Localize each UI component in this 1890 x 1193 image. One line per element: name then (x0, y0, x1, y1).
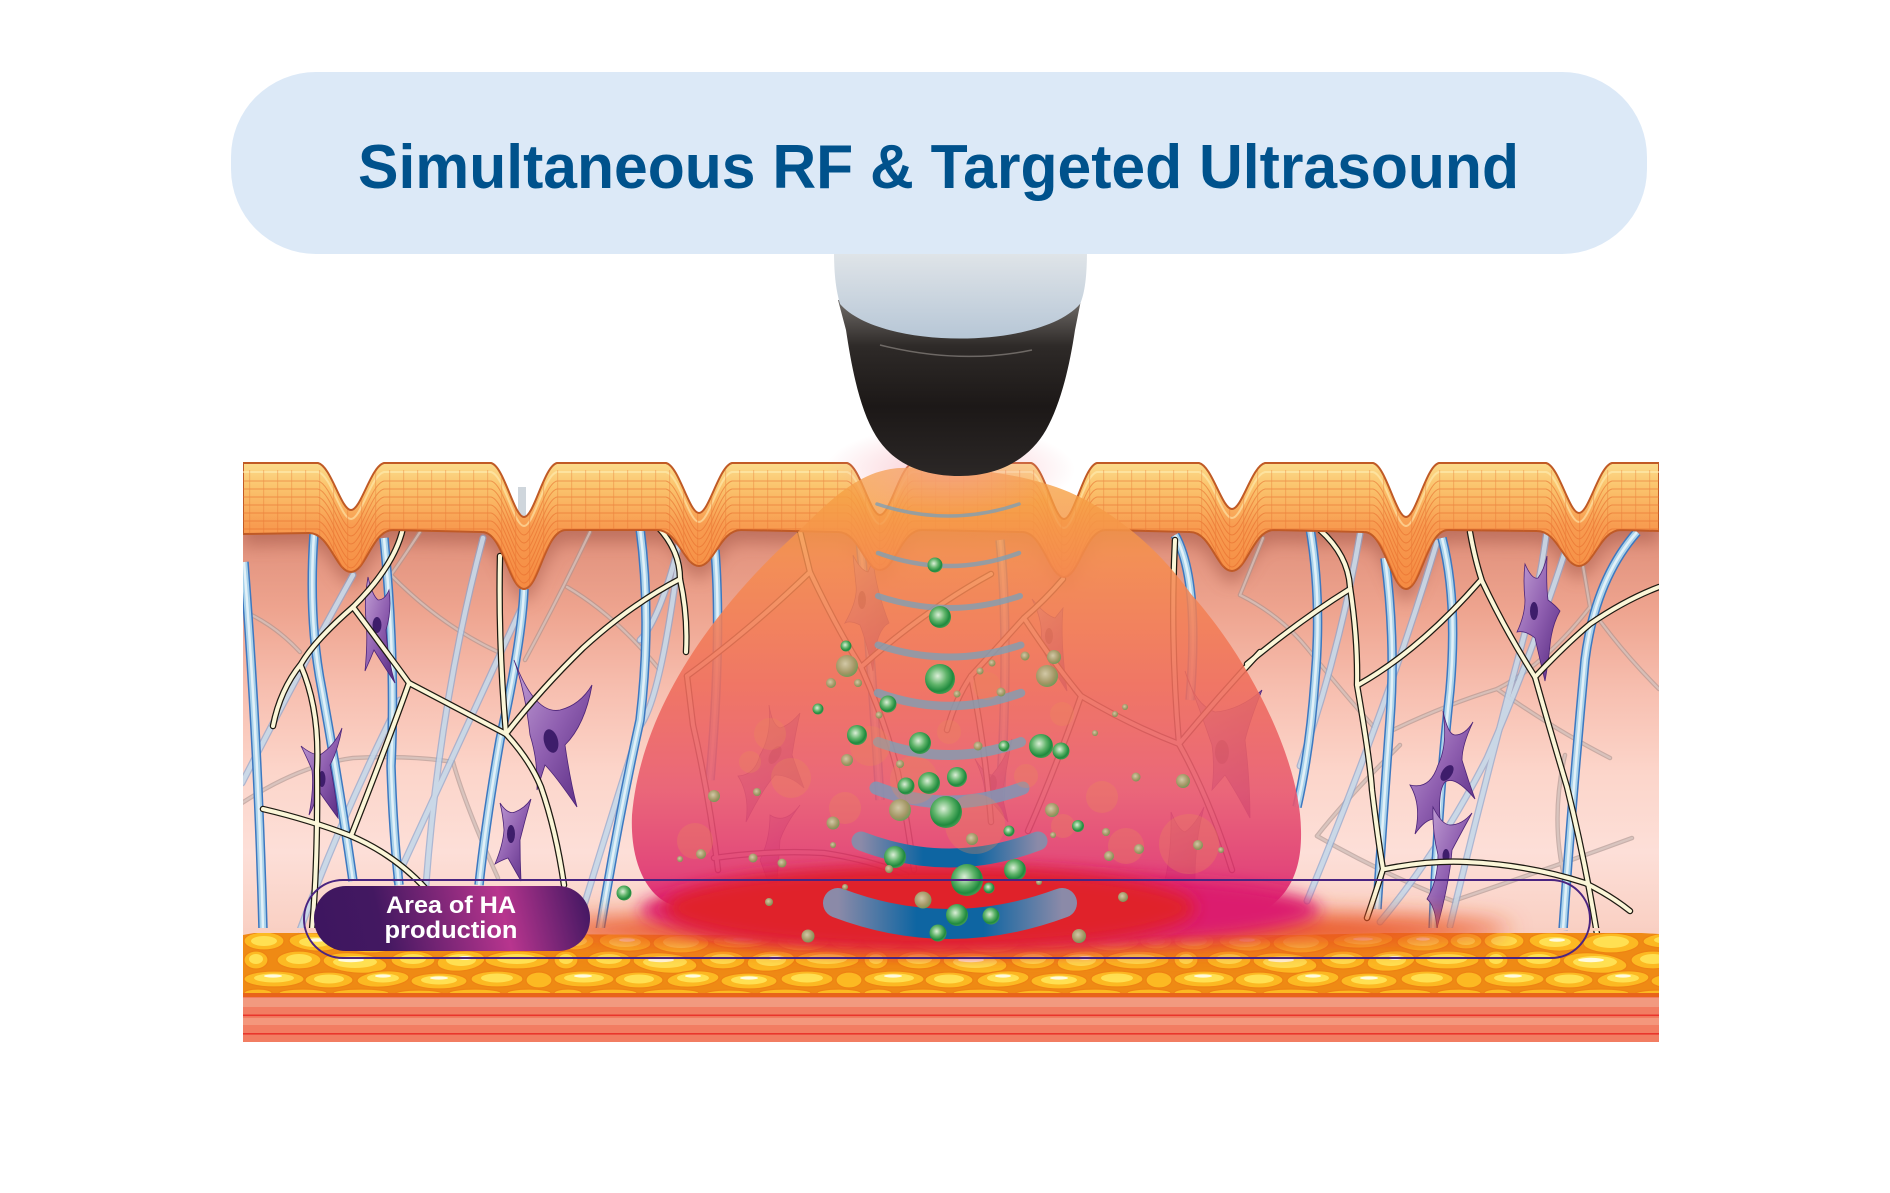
fat layer (243, 928, 1659, 997)
title pill (231, 72, 1647, 254)
fibroblast cells (301, 555, 1560, 928)
green hyaluronic acid bubbles (616, 558, 1084, 942)
tan small bubbles (677, 650, 1224, 943)
area of HA production outline (304, 880, 1590, 958)
pale blue fibres (242, 530, 1567, 930)
label: area of HA production: production (384, 917, 518, 944)
skin cross-section (242, 463, 1659, 1042)
RF energy dome (632, 468, 1301, 921)
faint orange bubbles (677, 672, 1219, 874)
glow around handpiece (825, 425, 1075, 515)
label: area of HA production: Area of HA (386, 892, 516, 919)
ultrasound waves (838, 504, 1062, 924)
muscle layer (243, 997, 1659, 1042)
label: area of HA production (314, 886, 590, 951)
small grey marker in skin fold (518, 487, 526, 517)
reticular grey fibres (242, 532, 1659, 901)
blue elastin fibres (244, 528, 1637, 930)
cell nuclei (318, 591, 1538, 863)
dermis background (243, 528, 1659, 938)
title text: Simultaneous RF & Targeted Ultrasound (358, 133, 1519, 202)
handpiece (834, 250, 1087, 476)
RF heat glow tail at base (530, 910, 1510, 950)
epidermis layer (243, 463, 1659, 595)
shadow under epidermis (243, 531, 1659, 604)
magenta and red heat core (640, 866, 1320, 950)
cream collagen fibres (263, 526, 1659, 934)
